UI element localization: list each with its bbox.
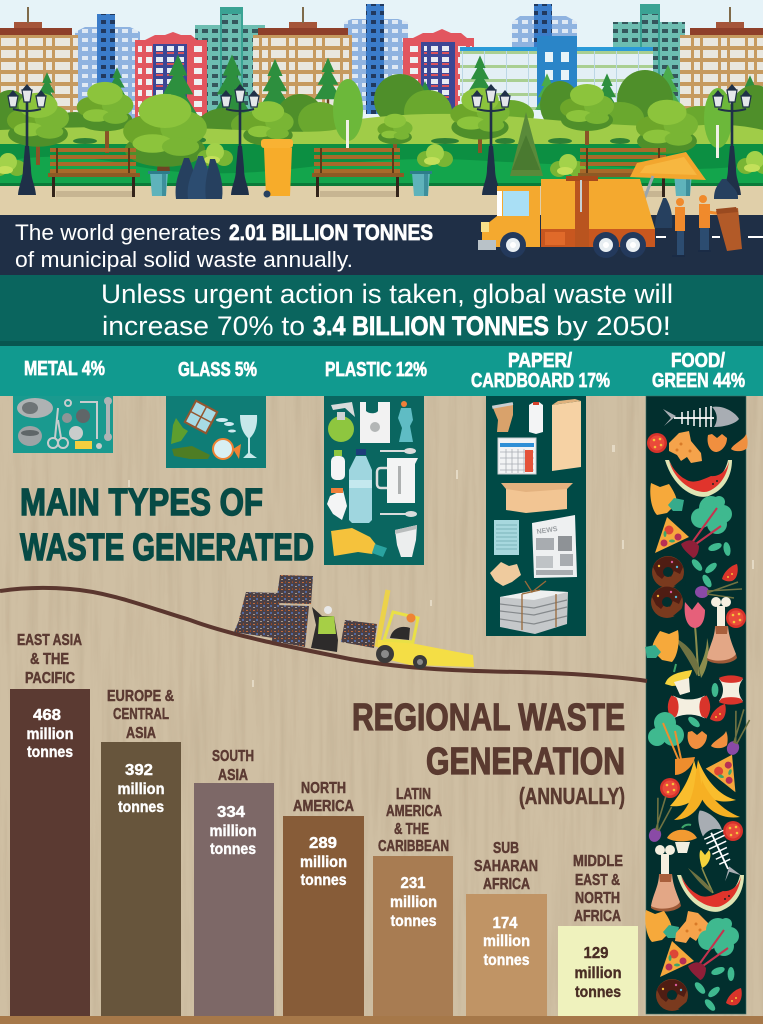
label: glass: GLASS 5% bbox=[178, 359, 257, 381]
bar: North America bbox=[283, 780, 364, 1016]
bar: Sub Saharan Africa: SAHARAN bbox=[474, 858, 538, 875]
bar: East Asia and the Pacific: 468 bbox=[33, 707, 61, 724]
street lamps bbox=[8, 84, 751, 195]
bar: East Asia and the Pacific: & THE bbox=[30, 651, 69, 668]
floor strip bbox=[0, 1016, 763, 1024]
heading: main types of waste generated: MAIN TYPES OF bbox=[20, 482, 263, 524]
bar: Europe and Central Asia: CENTRAL bbox=[113, 706, 169, 723]
bar: Middle East and North Africa bbox=[558, 853, 638, 1016]
sky bbox=[0, 0, 763, 130]
panel: glass bbox=[166, 396, 266, 468]
panel: paper and cardboard: NEWS bbox=[536, 526, 558, 536]
label: food and green: FOOD/ bbox=[671, 350, 725, 372]
statement text: 2.01 BILLION TONNES bbox=[229, 220, 433, 245]
bar: North America: AMERICA bbox=[293, 798, 354, 815]
bar: Latin America and the Caribbean: million bbox=[390, 894, 437, 911]
bar: South Asia bbox=[194, 748, 274, 1016]
bar: North America: million bbox=[300, 854, 347, 871]
bar: North America: NORTH bbox=[301, 780, 346, 797]
banner: urgent action message: increase 70% to bbox=[102, 311, 305, 341]
bar: Europe and Central Asia: EUROPE & bbox=[107, 688, 174, 705]
bar: South Asia: million bbox=[210, 823, 256, 840]
bar: East Asia and the Pacific: tonnes bbox=[27, 744, 73, 761]
park: foreground trees bbox=[0, 79, 763, 177]
road dashes bbox=[656, 236, 763, 238]
bar: Middle East and North Africa: EAST & bbox=[575, 872, 620, 889]
bar: Middle East and North Africa: million bbox=[574, 965, 622, 982]
bar: Sub Saharan Africa: SUB bbox=[493, 840, 519, 857]
curved slope line bbox=[0, 588, 647, 681]
statement text bbox=[15, 220, 433, 272]
bar: Middle East and North Africa: tonnes bbox=[575, 984, 621, 1001]
bar: Sub Saharan Africa: AFRICA bbox=[483, 876, 530, 893]
heading: regional waste generation: REGIONAL WASTE bbox=[352, 697, 625, 739]
buildings: tan apartment blocks bbox=[0, 7, 763, 115]
icon: compacted waste bales bbox=[234, 575, 377, 648]
banner: urgent action message: by 2050! bbox=[556, 311, 671, 341]
bar: Latin America and the Caribbean: AMERICA bbox=[386, 803, 442, 820]
park: bushes and hills bbox=[0, 70, 763, 186]
bar: South Asia: 334 bbox=[217, 804, 245, 821]
panel: food and green waste bbox=[643, 396, 752, 1014]
statement text: of municipal solid waste annually. bbox=[15, 247, 353, 272]
banner illustration: city and park bbox=[0, 0, 763, 216]
label: paper and cardboard: CARDBOARD 17% bbox=[471, 370, 610, 392]
icon: waste workers with bag and bin bbox=[655, 195, 742, 257]
band: world generates bbox=[0, 215, 763, 275]
bar: Europe and Central Asia bbox=[101, 688, 181, 1016]
bar: Middle East and North Africa: AFRICA bbox=[574, 908, 621, 925]
bar: Sub Saharan Africa bbox=[466, 840, 547, 1016]
heading: regional waste generation bbox=[352, 697, 625, 809]
bar: Latin America and the Caribbean: 231 bbox=[400, 875, 426, 892]
bar: Latin America and the Caribbean: CARIBBEAN bbox=[378, 838, 449, 855]
bar: North America: 289 bbox=[309, 835, 337, 852]
rubbish bags bbox=[176, 156, 738, 199]
panel: plastic bbox=[324, 396, 424, 565]
park: conifers behind bbox=[37, 55, 761, 122]
label: plastic: PLASTIC 12% bbox=[325, 359, 427, 381]
bar: Europe and Central Asia: million bbox=[118, 781, 164, 798]
buildings: white and blue block bbox=[460, 36, 653, 110]
bar: North America: tonnes bbox=[300, 872, 347, 889]
bar: South Asia: SOUTH bbox=[212, 748, 254, 765]
icon: garbage truck bbox=[478, 152, 706, 258]
sidewalk bbox=[0, 186, 763, 216]
bar: East Asia and the Pacific: EAST ASIA bbox=[17, 632, 82, 649]
bench left bbox=[48, 148, 140, 197]
label: food and green bbox=[652, 350, 745, 392]
banner: urgent action message: 3.4 BILLION TONNES bbox=[313, 311, 549, 341]
bar: East Asia and the Pacific: million bbox=[26, 726, 74, 743]
food icons: bottom group bbox=[645, 845, 744, 1013]
heading: main types of waste generated bbox=[20, 482, 314, 569]
bar: Latin America and the Caribbean bbox=[373, 786, 453, 1016]
bar: Latin America and the Caribbean: tonnes bbox=[390, 913, 437, 930]
bar: Middle East and North Africa: MIDDLE bbox=[573, 853, 623, 870]
buildings: background blue and teal towers bbox=[75, 4, 685, 124]
bench right bbox=[578, 148, 670, 197]
heading: regional waste generation: (ANNUALLY) bbox=[519, 783, 625, 809]
bar: Latin America and the Caribbean: LATIN bbox=[396, 786, 431, 803]
panel: metal bbox=[13, 396, 113, 453]
bar: Sub Saharan Africa: 174 bbox=[492, 915, 518, 932]
bar: East Asia and the Pacific bbox=[10, 632, 90, 1016]
banner: urgent action message: Unless urgent action is taken, global waste will bbox=[101, 279, 673, 309]
teal trash cans bbox=[148, 171, 694, 196]
bar: Sub Saharan Africa: million bbox=[483, 933, 530, 950]
bar: Europe and Central Asia: 392 bbox=[125, 762, 153, 779]
heading: main types of waste generated: WASTE GENERATED bbox=[20, 527, 314, 569]
label: paper and cardboard: PAPER/ bbox=[508, 350, 572, 372]
label: paper and cardboard bbox=[471, 350, 610, 392]
panel: paper and cardboard bbox=[486, 396, 586, 636]
heading: regional waste generation: GENERATION bbox=[426, 741, 625, 783]
banner: urgent action message bbox=[0, 275, 763, 346]
category header band bbox=[0, 346, 763, 396]
bar: Middle East and North Africa: 129 bbox=[584, 945, 609, 962]
bar: Sub Saharan Africa: tonnes bbox=[484, 952, 530, 969]
bar: South Asia: tonnes bbox=[210, 841, 256, 858]
food icons: middle group bbox=[643, 664, 752, 883]
bar: Europe and Central Asia: ASIA bbox=[126, 725, 156, 742]
bar: East Asia and the Pacific: PACIFIC bbox=[25, 670, 75, 687]
bar: South Asia: ASIA bbox=[218, 767, 248, 784]
label: metal: METAL 4% bbox=[24, 358, 105, 380]
bench centre bbox=[312, 148, 404, 197]
icon: worker with vest bbox=[311, 606, 338, 652]
bar: Middle East and North Africa: NORTH bbox=[575, 890, 620, 907]
bar: Europe and Central Asia: tonnes bbox=[118, 799, 164, 816]
buildings: red apartment blocks bbox=[135, 29, 474, 118]
bar: Latin America and the Caribbean: & THE bbox=[394, 821, 429, 838]
icon: forklift bbox=[376, 590, 474, 669]
statement text: The world generates bbox=[15, 220, 221, 245]
food icons: top group bbox=[645, 406, 748, 678]
yellow wheelie bin bbox=[261, 139, 293, 198]
